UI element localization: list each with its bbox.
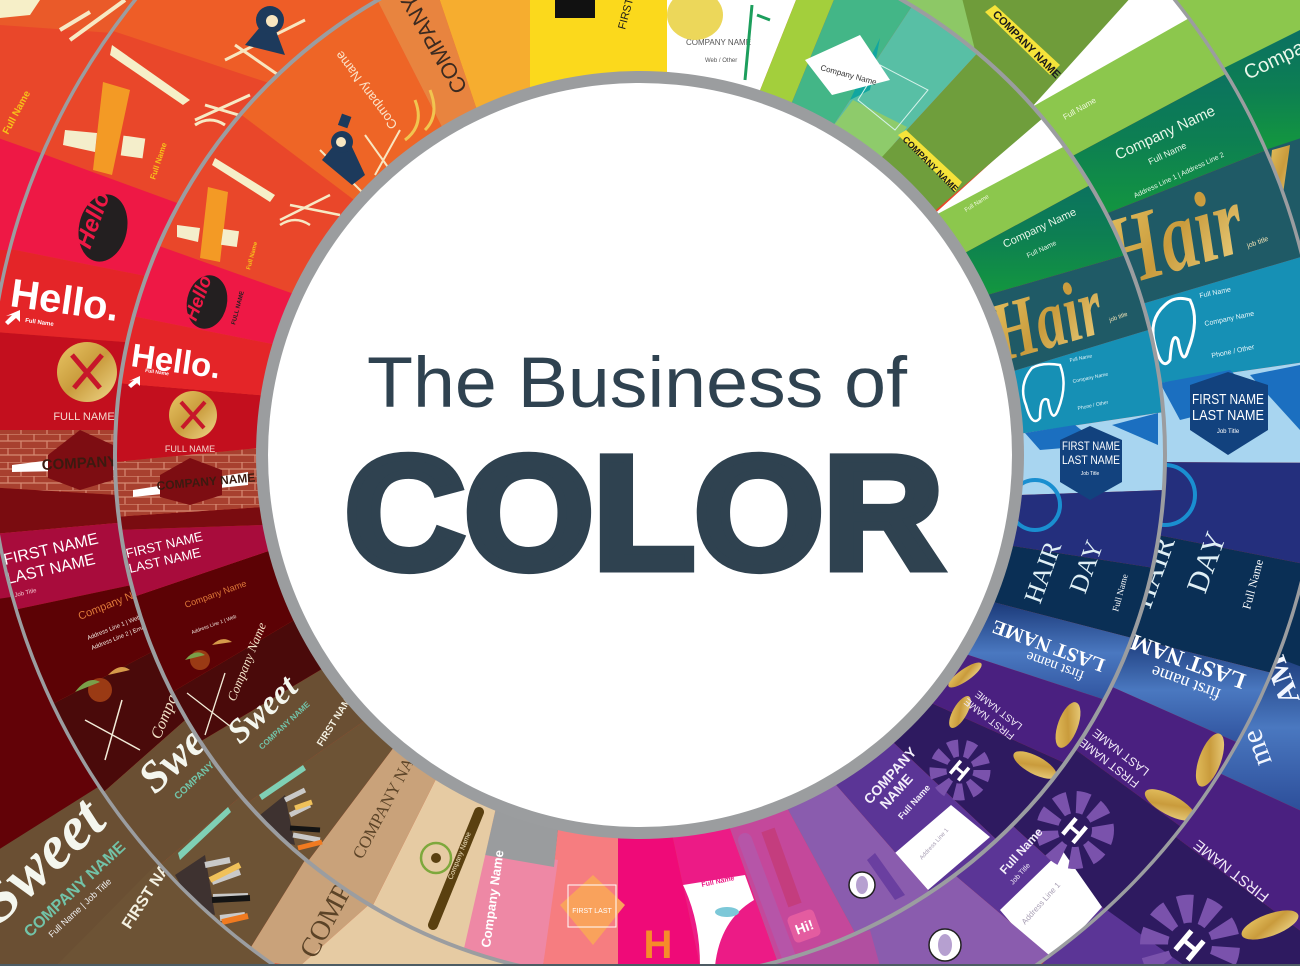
wedge: purple (909, 646, 1139, 777)
middle icon: flower H (1047, 802, 1103, 858)
wedge: beige (353, 755, 500, 966)
inner icon: yellow splash (667, 0, 723, 40)
inner text: company name violet (860, 743, 932, 821)
middle icon: gold lips (1144, 733, 1224, 820)
inner icon: bone sketch (280, 195, 340, 225)
middle icon: Hair Day mark: HAIR (1126, 532, 1182, 612)
wedge: red hello (82, 310, 312, 398)
wedge: pink (460, 848, 558, 966)
outer icon: flower H (1154, 909, 1226, 966)
inner icon: hex name badge: LAST NAME (1062, 453, 1120, 467)
inner icon: navy ring (1010, 480, 1060, 530)
middle text: Full Name lime: Full Name (1062, 95, 1098, 122)
wedge: magenta (618, 820, 700, 966)
inner icon: coral diamond: FIRST LAST (572, 908, 612, 915)
inner card: white watercolor: Company Name (819, 63, 878, 87)
wedge: wood (287, 731, 448, 945)
wedge: moss (859, 32, 1071, 233)
outer text: Sweet: COMPANY NAME (21, 838, 129, 941)
middle icon: flower H: H (1055, 812, 1093, 851)
middle card: brick company name (12, 430, 114, 490)
inner icon: pink stripes card: Hi! (793, 916, 816, 938)
inner icon: Hello oval: Hello (181, 273, 217, 324)
inner text: purple name: LAST NAME (973, 688, 1025, 731)
inner text: company on white (686, 38, 751, 64)
wedge: brown (171, 644, 387, 813)
wedge: white strip (930, 90, 1095, 218)
middle text: Hair (1112, 192, 1268, 281)
inner text: Company Name maroon (183, 578, 248, 636)
middle text: purple name: LAST NAME (1090, 726, 1152, 779)
inner card: cream bar (212, 158, 275, 202)
inner text: Company Name: Company Name (332, 48, 400, 132)
inner icon: knives badge: FULL NAME (165, 444, 215, 454)
wedge: dark red (83, 505, 292, 531)
inner text: first last: FIRST NAME (124, 529, 204, 561)
middle icon: chef tools (224, 6, 306, 75)
inner text: Company Name green: Full Name (1026, 240, 1058, 260)
wedge: grey card (485, 790, 560, 867)
middle text: Sweet: Sweet (128, 694, 240, 802)
inner icon: Hair Day mark (1018, 536, 1130, 613)
inner text: Hair: Hair (979, 260, 1114, 380)
wedge: lime strip (751, 0, 842, 129)
middle text: Company Name maroon: Company Name (77, 582, 155, 623)
wedge: watercolor (781, 0, 926, 153)
middle text: Hello.: Full Name (25, 318, 55, 328)
middle text: Sweet: COMPANY NAME (173, 738, 241, 802)
inner text: tooth details: Phone / Other (1077, 400, 1109, 412)
inner icon: white hair shape (683, 875, 754, 966)
inner text: Sweet: Sweet (220, 667, 306, 751)
inner text: Hello.: Full Name (145, 368, 169, 377)
inner text: H orange: H (644, 923, 672, 966)
inner icon: tool roll (259, 765, 322, 848)
wedge: agate (941, 595, 1159, 711)
inner icon: Hello oval: FULL NAME (231, 291, 246, 326)
outer text: Full Name: Full Name (1, 89, 33, 136)
outer cream bar (0, 0, 40, 18)
middle text: Full Name violet: Job Title (1009, 862, 1032, 886)
title: COLOR: COLOR (345, 423, 943, 602)
wedge: orange (242, 2, 442, 200)
inner card: white watercolor (805, 35, 890, 95)
inner text: first last on wood: FIRST NAME (315, 691, 357, 749)
inner text: first name LAST NAME: LAST NAME (989, 615, 1108, 676)
middle text: Company Name maroon: Address Line 2 | Email (91, 624, 148, 652)
wedge: teal green (937, 171, 1150, 302)
inner text: first last (124, 529, 204, 576)
inner icon: chef tools (320, 114, 400, 195)
wedge: dark teal (966, 542, 1180, 645)
wedge: tool wood (233, 705, 406, 889)
wedge: white card (667, 0, 796, 90)
middle text: Full Name violet: Full Name (997, 825, 1046, 877)
middle text: first last: LAST NAME (5, 551, 97, 588)
wedge: crimson knives (82, 380, 293, 465)
inner icon: green sketch (745, 5, 770, 80)
inner text: Company Name script: Company Name (224, 620, 269, 703)
middle icon: Hello oval: Hello (70, 188, 116, 252)
middle text: Company Name script: Company Name (148, 640, 202, 741)
middle card: cream bar (110, 45, 190, 105)
inner card: brick company name (133, 458, 256, 505)
inner icon: crossed hipster logo (185, 639, 235, 735)
bottom edge (0, 964, 1300, 966)
middle text: first name LAST NAME (1130, 634, 1247, 700)
middle icon: crossed hipster logo (75, 667, 140, 760)
middle icon: tool roll (175, 807, 250, 922)
middle icon: bone sketch (195, 95, 255, 125)
inner text: yellow tag: COMPANY NAME (901, 134, 960, 194)
wedge: maroon (101, 542, 333, 717)
outer text: first last name: FIRST NAME (119, 841, 187, 932)
outer text: LAST NAME on agate: me (1235, 725, 1279, 771)
middle icon: chef mascot (929, 929, 961, 961)
middle text: tooth details: Company Name (1204, 311, 1255, 328)
middle text: Company Name green (1116, 108, 1224, 198)
inner icon: pink stripes card (745, 830, 822, 960)
inner icon: Hair Day mark: Full Name (1110, 573, 1130, 613)
inner text: wood company: COMPANY NAME (349, 732, 430, 862)
inner icon: chef mascot (849, 872, 875, 898)
inner text: Sweet: COMPANY NAME (257, 699, 312, 751)
inner icon: gold lips (945, 659, 1086, 784)
middle text: first last: FIRST NAME (2, 531, 100, 569)
middle text: address lines: Address Line 1 (1020, 880, 1063, 926)
inner icon: Hello oval (181, 271, 246, 333)
middle icon: knives badge: FULL NAME (53, 411, 115, 423)
middle text: first name LAST NAME: first name (1148, 661, 1223, 705)
wedge: amber (440, 0, 530, 108)
middle icon: navy ring (1162, 463, 1197, 527)
inner icon: orange baguette panel (177, 187, 239, 262)
middle icon: hex name badge: LAST NAME (1192, 407, 1264, 424)
middle icon: hex name badge: Job Title (1217, 429, 1240, 435)
middle text: first name LAST NAME: LAST NAME (1113, 624, 1249, 694)
inner icon: rooster seal (421, 843, 451, 873)
middle icon: Hair Day mark: DAY (1181, 528, 1233, 597)
inner text: Company Name maroon: Company Name (183, 578, 248, 610)
card: white (895, 805, 990, 890)
inner icon: Hair Day mark: HAIR (1018, 537, 1068, 607)
wedge: blue cubes (991, 408, 1194, 496)
title line: The Business of: The Business of (367, 344, 907, 423)
wedge: navy (987, 489, 1194, 572)
wedge: textured violet (822, 728, 1017, 914)
middle text: tooth details: Phone / Other (1211, 344, 1256, 360)
wedge: dark violet (878, 693, 1096, 859)
inner text: company name violet: Full Name (896, 783, 932, 821)
wedge: crimson (86, 524, 295, 608)
middle text: Company Name green: Full Name (1147, 140, 1188, 167)
inner text: Company Name maroon: Address Line 1 | Web (191, 614, 238, 636)
outer text: LAST NAME on agate (1235, 651, 1300, 771)
inner icon: knives badge (165, 391, 217, 454)
inner icon: flower H: H (944, 755, 974, 787)
center circle (256, 71, 1024, 839)
wedge: yellow (530, 0, 667, 87)
outer icon: pale bones (60, 0, 125, 40)
middle icon: Hair Day mark (1145, 530, 1263, 610)
middle icon: hex name badge: FIRST NAME (1192, 391, 1264, 408)
middle card: brick company name: COMPANY NA (41, 452, 143, 474)
wedge: bar (130, 597, 364, 759)
middle icon: orange baguette panel (63, 82, 145, 175)
inner text: first name LAST NAME: first name (1024, 647, 1086, 683)
middle icon: knives badge (53, 342, 117, 423)
middle icon: hex name badge (1190, 372, 1268, 455)
inner card: brick company name: COMPANY NAME (156, 470, 256, 493)
inner text: Company Name green: Company Name (1001, 206, 1078, 251)
middle text: Company Name green: Company Name (1113, 102, 1218, 164)
inner icon: tooth (1023, 364, 1064, 421)
wedge: brick (83, 445, 292, 519)
wedge: peach (378, 0, 476, 126)
inner icon: hex name badge: FIRST NAME (1062, 439, 1120, 453)
inner card: brown label (433, 812, 479, 925)
middle icon: Hair Day mark: Full Name (1239, 558, 1266, 611)
inner icon: flower H (938, 748, 982, 792)
middle text: Company Name green: Address Line 1 | Address Line 2 (1133, 152, 1225, 200)
wedge: turquoise (984, 320, 1191, 438)
inner icon: gold ornament (405, 90, 434, 140)
wedge: hot pink (669, 815, 779, 966)
inner text: tooth details: Company Name (1072, 372, 1109, 385)
inner icon: white hair shape: Full Name (701, 875, 735, 889)
middle text: wood company: COMPAN (294, 845, 376, 963)
middle text: Hair: job title (1245, 236, 1270, 250)
inner text: first last: LAST NAME (127, 545, 203, 576)
inner text: Full Name lime: Full Name (964, 194, 991, 214)
inner text: company on white: Web / Other (705, 58, 737, 64)
middle text: purple name: FIRST NAME (1076, 735, 1142, 791)
inner icon: hex name badge (1060, 426, 1122, 500)
inner text: company on white: COMPANY NAME (686, 38, 751, 47)
inner text: company name violet: NAME (876, 771, 916, 812)
wedge: coral (543, 810, 618, 966)
middle text: first last: Job Title (14, 588, 38, 599)
inner text: tooth details (1069, 353, 1109, 412)
inner icon: hex name badge: Job Title (1081, 471, 1100, 477)
middle text: Sweet (142, 732, 213, 798)
middle icon: Hello oval (78, 194, 128, 262)
inner text: Company Name pink: Company Name (478, 849, 507, 948)
wedge: hair (963, 248, 1181, 380)
inner text: Hair: job title (1108, 312, 1129, 324)
inner text: Full Name yellow: Full Name (246, 241, 260, 271)
middle text: Full Name yellow: Full Name (148, 141, 169, 181)
wedge: pink stripes (725, 795, 868, 966)
wedge: pink red (102, 236, 322, 352)
middle text: Company Name maroon (78, 592, 143, 650)
inner icon: coral diamond (560, 875, 625, 945)
wedge: lime (908, 126, 1116, 268)
middle text: tooth details: Full Name (1199, 286, 1232, 300)
inner text: tooth details: Full Name (1069, 353, 1093, 364)
inner text: address lines: Address Line 1 (919, 827, 951, 861)
inner teal outline (858, 65, 928, 130)
middle text: tooth details (1199, 286, 1256, 360)
middle text: Hello.: Hello. (8, 271, 122, 330)
outer text: name on purple: FIRST NAME (1191, 836, 1272, 905)
inner text: purple name: FIRST NAME (962, 695, 1017, 741)
middle text: first last (2, 531, 100, 599)
middle icon: tooth (1153, 298, 1195, 364)
inner icon: black card (555, 0, 644, 31)
inner card: brown label: Company Name (447, 831, 473, 881)
inner text: Hello.: Hello. (129, 336, 223, 385)
wedge: teal (815, 0, 997, 182)
outer text: Sweet: Full Name | Job Title (47, 876, 113, 939)
middle text: Company Name maroon: Address Line 1 | Web (87, 615, 142, 642)
middle text: yellow tag: COMPANY NAME (990, 9, 1062, 81)
inner icon: Hair Day mark: DAY (1063, 536, 1109, 597)
wedge: medium purple (780, 769, 949, 957)
inner text: company name violet: COMPANY (860, 743, 920, 807)
outer icon: gold lips (1238, 904, 1300, 946)
